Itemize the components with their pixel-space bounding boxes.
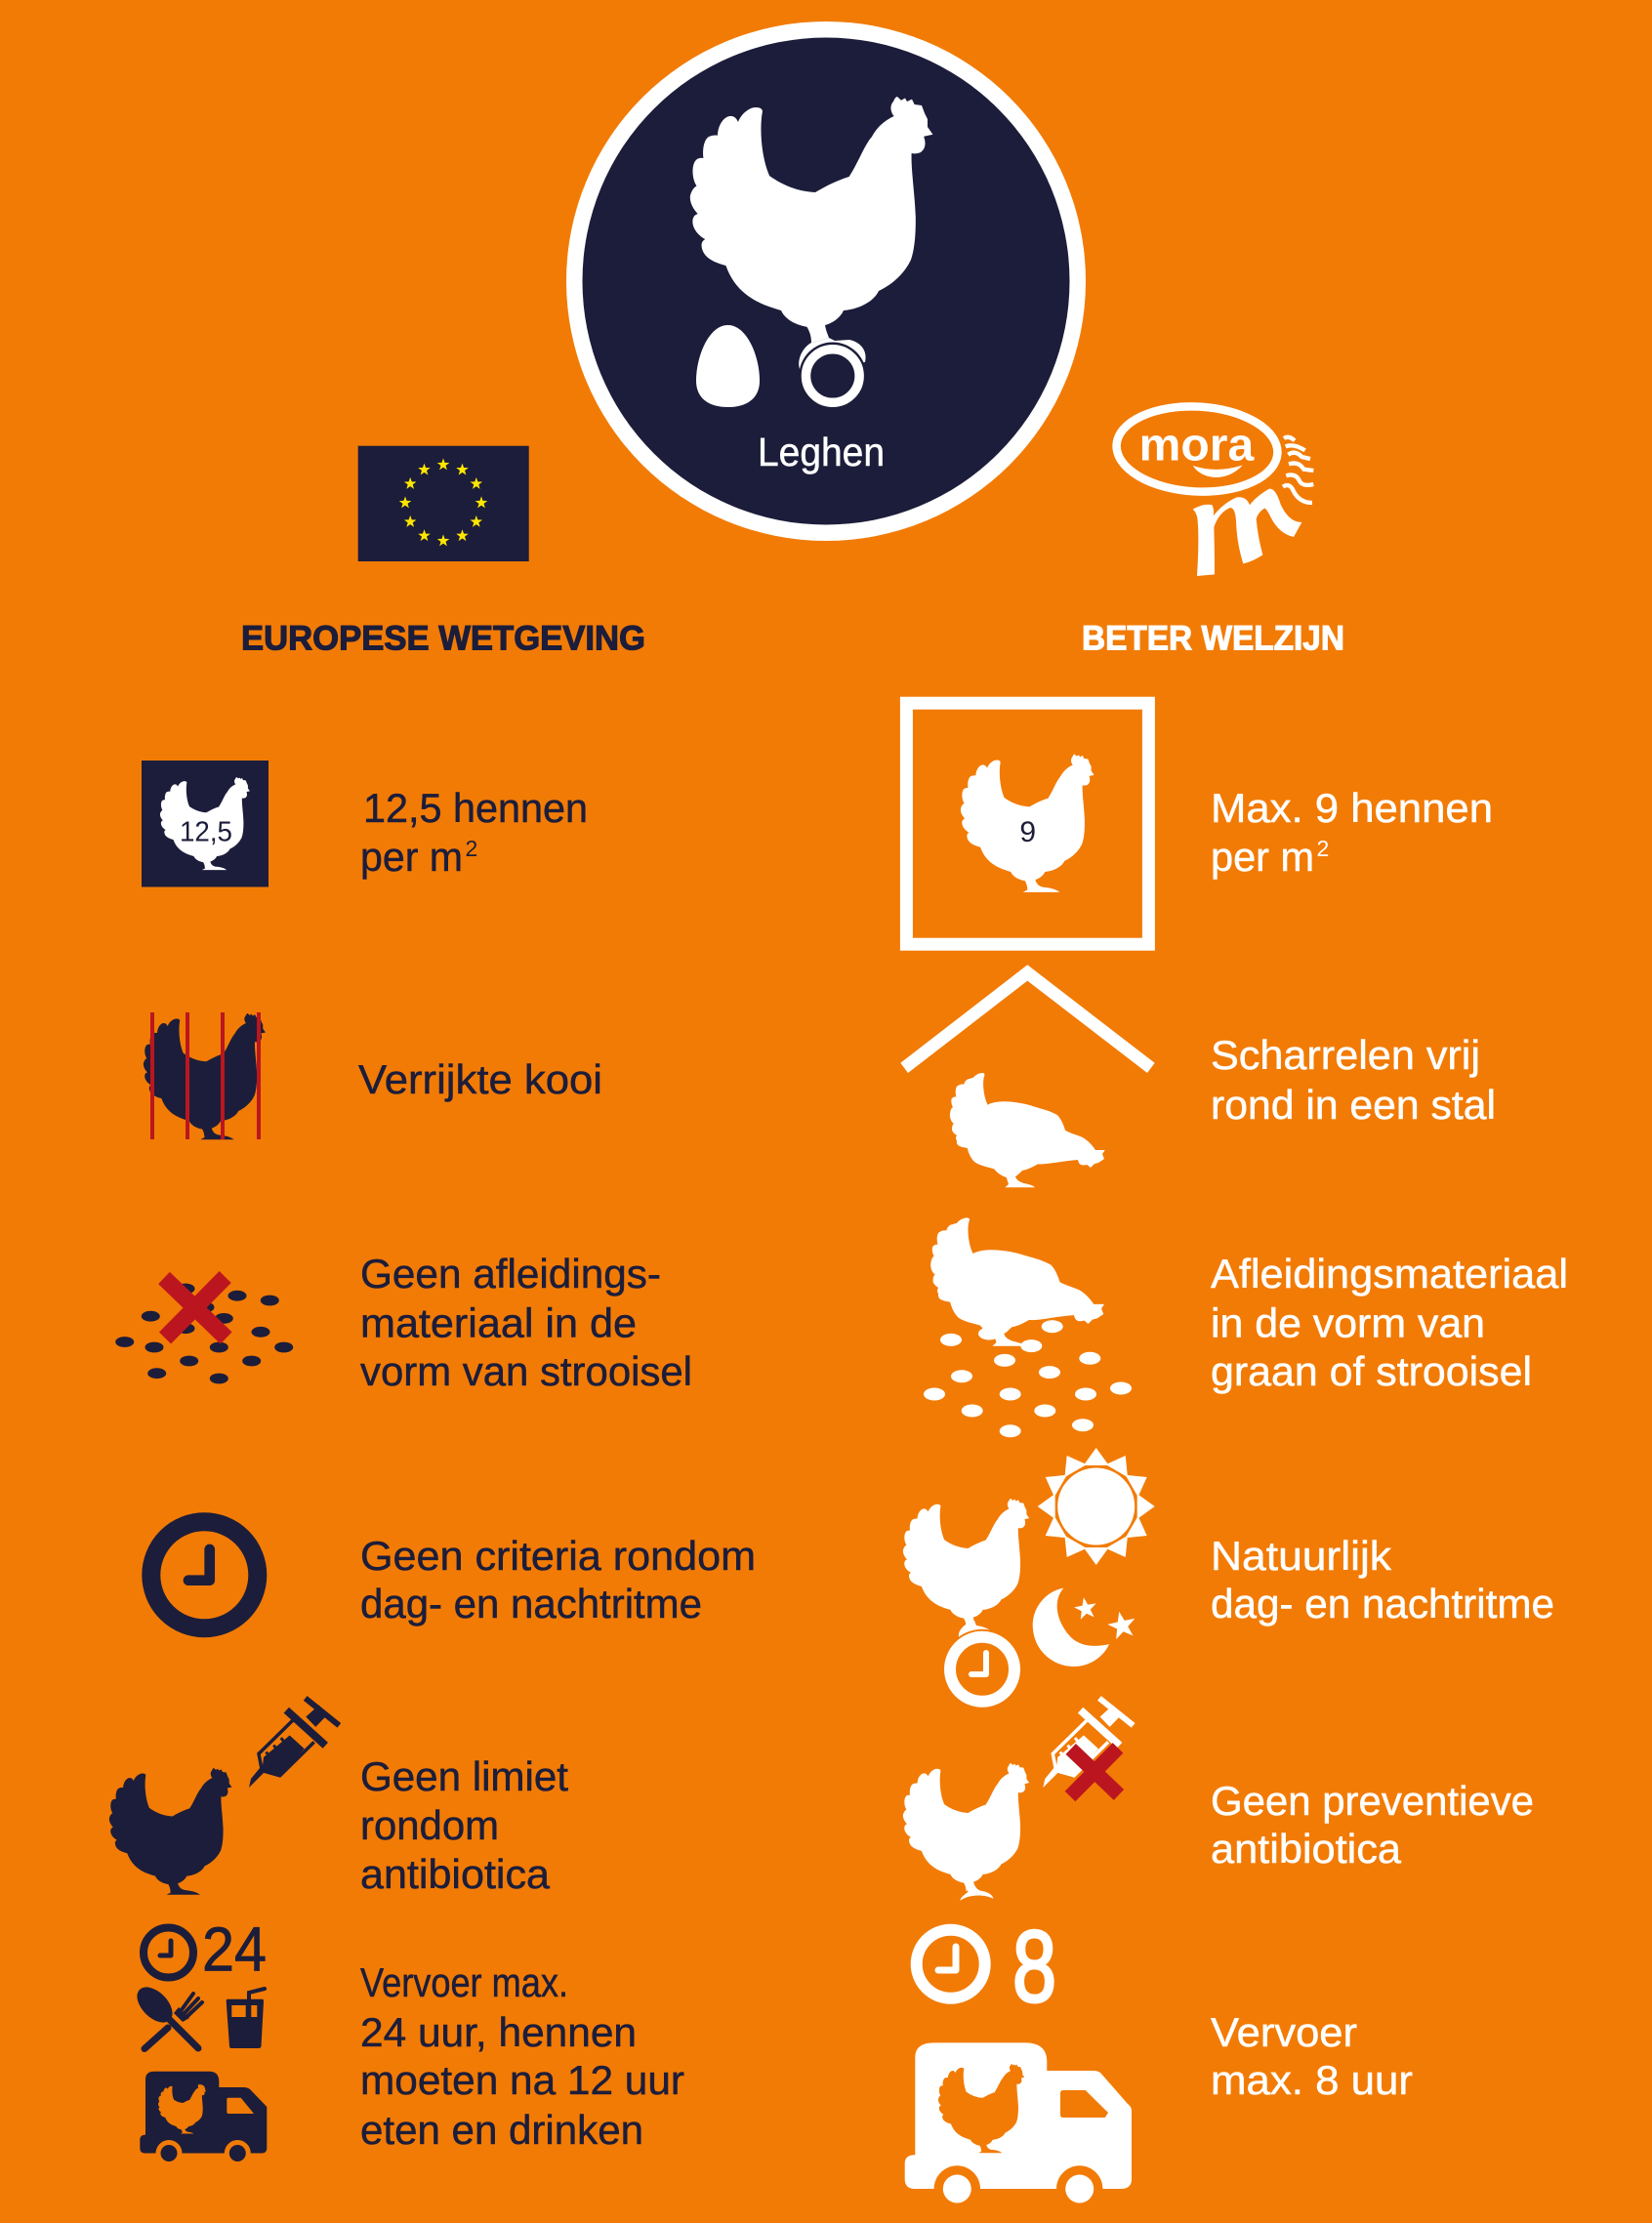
text: Geen preventieve antibiotica: Geen preventieve <box>1211 1778 1534 1824</box>
panel: EU row 5 antibiotics <box>109 1700 568 1897</box>
icon: pecking hen with grain <box>924 1217 1132 1437</box>
icon: pecking hen <box>950 1073 1105 1187</box>
icon: moon and stars <box>1033 1588 1138 1667</box>
text: Afleidingsmateriaal: graan of strooisel <box>1211 1348 1532 1394</box>
icon: hen 12,5 in square: 12,5 <box>180 817 232 848</box>
text: Scharrelen vrij: Scharrelen vrij <box>1211 1032 1480 1078</box>
icon: clock 8: 8 <box>1012 1911 1056 2024</box>
icon: hen <box>903 1763 1029 1901</box>
text: 12,5 hennen per m2: 12,5 hennen <box>363 785 588 831</box>
icon: hen 9 in frame <box>906 703 1148 944</box>
icon: clock 24 <box>144 1914 267 1984</box>
text: Max. 9 hennen per m2: Max. 9 hennen <box>1211 785 1493 831</box>
icon: drink <box>227 1989 265 2048</box>
text: Vervoer max. 8 uur: Vervoer <box>1211 2009 1357 2055</box>
icon: EU flag <box>358 446 529 561</box>
icon: crossed-out syringe <box>1043 1700 1131 1796</box>
panel: Mora row 4 rhythm <box>903 1448 1554 1709</box>
text: Afleidingsmateriaal: Afleidingsmateriaal <box>1211 1251 1568 1297</box>
text: Scharrelen vrij: rond in een stal <box>1211 1082 1496 1128</box>
text: Geen afleidingsmateriaal: materiaal in de <box>360 1300 637 1345</box>
panel: EU row 1 density <box>142 761 588 886</box>
panel: Mora row 6 transport <box>905 1911 1413 2212</box>
text: Geen criteria rondom: Geen criteria rondom <box>360 1533 756 1579</box>
text: Geen afleidingsmateriaal: Geen afleidings- <box>360 1251 661 1297</box>
icon: egg <box>696 325 760 407</box>
icon: transport truck navy <box>140 2072 267 2166</box>
text: Vervoer max. 24 uur <box>360 1959 684 2153</box>
icon: hen 9 in frame: 9 <box>1019 816 1036 848</box>
icon: roof <box>900 965 1155 1073</box>
icon: hen <box>109 1768 231 1895</box>
text: 12,5 hennen per m2 <box>360 785 588 880</box>
text: Afleidingsmateriaal <box>1211 1251 1568 1394</box>
text: Max. 9 hennen per m2: per m <box>1211 834 1314 880</box>
heading: Beter welzijn: BETER WELZIJN <box>1082 619 1344 658</box>
panel: Mora row 2 barn <box>900 965 1496 1187</box>
text: Max. 9 hennen per m2 <box>1211 785 1493 880</box>
text: Vervoer max. 24 uur: moeten na 12 uur <box>360 2057 684 2103</box>
panel: Mora row 3 bedding <box>924 1217 1568 1437</box>
text: Geen criteria rondom: dag- en nachtritme <box>360 1581 702 1626</box>
icon: hen behind cage bars <box>144 1012 266 1139</box>
text: 12,5 hennen per m2: 2 <box>465 836 477 861</box>
text: Afleidingsmateriaal: in de vorm van <box>1211 1300 1485 1345</box>
text: Scharrelen vrij <box>1211 1032 1496 1128</box>
text: Vervoer max. 24 uur: 24 uur, hennen <box>360 2009 637 2055</box>
text: Geen limiet rondom antibiotica: Geen limiet <box>360 1753 568 1799</box>
text: Max. 9 hennen per m2: 2 <box>1316 836 1329 861</box>
text: Verrijkte kooi: Verrijkte kooi <box>358 1056 602 1102</box>
text: Geen preventieve antibiotica: antibiotica <box>1211 1826 1402 1872</box>
panel: EU row 2 cage <box>144 1012 602 1139</box>
text: Geen limiet rondom antibiotica: antibiotica <box>360 1851 551 1897</box>
text: Vervoer max. 8 uur <box>1211 2009 1413 2103</box>
text: 12,5 hennen per m2: per m <box>360 834 463 880</box>
icon: mora logo: mora <box>1139 419 1255 471</box>
emblem circle <box>566 21 1086 541</box>
icon: sun <box>1038 1448 1155 1565</box>
icon: mora logo <box>1114 402 1313 576</box>
text: Geen afleidingsmateriaal <box>360 1251 692 1394</box>
text: Natuurlijk dag- en nachtritme: Natuurlijk <box>1211 1533 1392 1579</box>
label: Leghen: Leghen <box>758 430 885 474</box>
text: Geen limiet rondom antibiotica: rondom <box>360 1802 499 1848</box>
icon: clock <box>151 1522 258 1628</box>
text: Geen preventieve antibiotica <box>1211 1778 1534 1872</box>
icon: syringe <box>249 1700 337 1788</box>
icon: hen 12,5 in square <box>142 761 268 886</box>
text: Natuurlijk dag- en nachtritme <box>1211 1533 1554 1626</box>
icon: hen with clock <box>903 1499 1029 1709</box>
icon: large hen <box>690 97 932 369</box>
icon: transport truck white <box>905 2042 1132 2212</box>
text: Vervoer max. 8 uur: max. 8 uur <box>1211 2057 1413 2103</box>
text: Vervoer max. 24 uur: Vervoer max. <box>360 1959 568 2005</box>
panel: EU row 3 bedding <box>115 1251 692 1394</box>
icon: ring <box>799 342 866 410</box>
panel: Mora row 1 density <box>906 703 1493 944</box>
text: Geen criteria rondom <box>360 1533 756 1626</box>
icon: clock 8 <box>917 1911 1056 2024</box>
icon: crossed-out bedding grains <box>115 1277 293 1383</box>
text: Geen afleidingsmateriaal: vorm van strooisel <box>360 1348 692 1394</box>
panel: leghen emblem <box>566 21 1086 541</box>
panel: EU row 4 rhythm <box>151 1522 756 1628</box>
text: Natuurlijk dag- en nachtritme: dag- en nachtritme <box>1211 1581 1554 1626</box>
panel: Mora row 5 antibiotics <box>903 1700 1534 1901</box>
icon: spoon and fork <box>131 1981 202 2048</box>
heading: Europese wetgeving: EUROPESE WETGEVING <box>241 619 645 658</box>
icon: clock 24: 24 <box>202 1914 267 1984</box>
panel: EU row 6 transport <box>131 1914 684 2166</box>
text: Vervoer max. 24 uur: eten en drinken <box>360 2107 643 2153</box>
text: Geen limiet rondom antibiotica <box>360 1753 568 1897</box>
